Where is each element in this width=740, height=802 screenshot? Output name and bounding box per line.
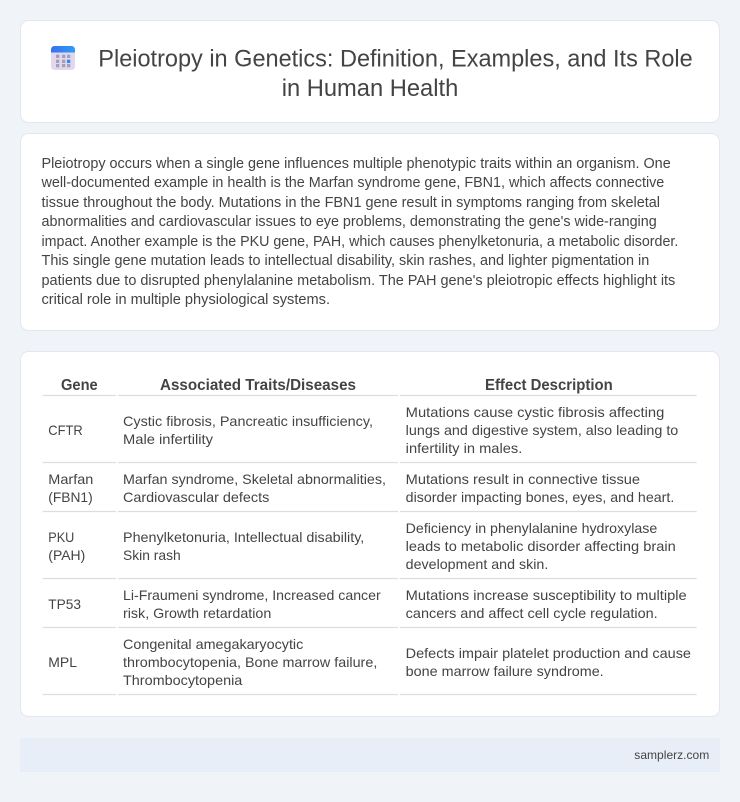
table row: MPL: MPL bbox=[48, 654, 77, 670]
table row: MPL: Defects impair platelet production and cause bbox=[406, 645, 691, 661]
title: in Human Health bbox=[282, 75, 458, 102]
table row: Marfan (FBN1): Marfan bbox=[48, 471, 93, 487]
table row: CFTR: lungs and digestive system, also leading to bbox=[406, 422, 679, 438]
panel: title header bbox=[20, 20, 720, 122]
table row: PKU (PAH): Phenylketonuria, Intellectual disability, bbox=[123, 529, 364, 545]
text block: pleiotropy description: Pleiotropy occurs when a single gene influences multiple phenotypic traits within an organism. One bbox=[42, 156, 671, 172]
icon: calendar grid bbox=[51, 46, 75, 70]
title: Pleiotropy in Genetics: Definition, Examples, and Its Role bbox=[98, 46, 693, 72]
table header: Gene bbox=[61, 377, 98, 394]
table row: PKU (PAH): Skin rash bbox=[123, 547, 181, 563]
text block: pleiotropy description: abnormalities and cardiovascular issues to eye problems, demonstrating the gene's wide-ranging bbox=[42, 214, 657, 230]
table row: TP53 bbox=[43, 587, 697, 628]
text block: pleiotropy description: critical role in multiple physiological systems. bbox=[42, 292, 330, 308]
table row: Marfan (FBN1): Cardiovascular defects bbox=[123, 489, 269, 505]
panel: gene table bbox=[20, 352, 720, 716]
table row: CFTR bbox=[43, 404, 697, 462]
table row: CFTR: infertility in males. bbox=[406, 440, 522, 456]
table row: Marfan (FBN1): (FBN1) bbox=[48, 489, 93, 505]
text block: pleiotropy description: well-documented example in health is the Marfan syndrome gene, FBN1, which affects connective bbox=[41, 175, 664, 191]
table row: CFTR: Male infertility bbox=[123, 431, 213, 447]
table row: MPL: bone marrow failure syndrome. bbox=[406, 663, 604, 679]
text block: pleiotropy description: patients due to disrupted phenylalanine metabolism. The PAH gene's pleiotropic effects highlight its bbox=[42, 273, 675, 289]
table header: Effect Description bbox=[485, 377, 613, 394]
footer: samplerz.com bbox=[634, 748, 709, 762]
text block: pleiotropy description: tissue throughout the body. Mutations in the FBN1 gene result in symptoms ranging from skeletal bbox=[42, 195, 660, 211]
table row: CFTR: Mutations cause cystic fibrosis affecting bbox=[406, 404, 664, 420]
text block: pleiotropy description: impact. Another example is the PKU gene, PAH, which causes phenylketonuria, a metabolic disorder. bbox=[42, 234, 678, 250]
table row: MPL: Congenital amegakaryocytic bbox=[123, 636, 303, 652]
table row: TP53: risk, Growth retardation bbox=[123, 605, 271, 621]
table row: TP53: TP53 bbox=[48, 596, 81, 612]
table row: TP53: cancers and affect cell cycle regulation. bbox=[406, 605, 658, 621]
text block: pleiotropy description bbox=[41, 156, 678, 308]
table row: TP53: Li-Fraumeni syndrome, Increased cancer bbox=[123, 587, 381, 603]
table row: CFTR: Cystic fibrosis, Pancreatic insufficiency, bbox=[123, 413, 373, 429]
table row: PKU (PAH): development and skin. bbox=[406, 556, 548, 572]
text block: pleiotropy description: This single gene mutation leads to intellectual disability, skin rashes, and lighter pigmentation in bbox=[42, 253, 649, 269]
table row: Marfan (FBN1): Marfan syndrome, Skeletal abnormalities, bbox=[123, 471, 386, 487]
table header bbox=[43, 377, 697, 396]
table row: MPL bbox=[43, 636, 697, 694]
table header: Associated Traits/Diseases bbox=[160, 377, 356, 394]
title bbox=[98, 46, 693, 102]
table row: Marfan (FBN1): Mutations result in connective tissue bbox=[406, 471, 640, 487]
table row: PKU (PAH): (PAH) bbox=[48, 547, 85, 563]
table row: PKU (PAH): Deficiency in phenylalanine hydroxylase bbox=[406, 520, 658, 536]
table row: Marfan (FBN1) bbox=[43, 471, 697, 512]
footer bbox=[20, 738, 720, 772]
table row: PKU (PAH): leads to metabolic disorder affecting brain bbox=[406, 538, 676, 554]
table row: PKU (PAH): PKU bbox=[48, 529, 74, 545]
table row: CFTR: CFTR bbox=[48, 422, 83, 438]
table row: MPL: Thrombocytopenia bbox=[123, 672, 243, 688]
table row: Marfan (FBN1): disorder impacting bones, eyes, and heart. bbox=[406, 489, 674, 505]
table row: PKU (PAH) bbox=[43, 520, 697, 578]
table row: MPL: thrombocytopenia, Bone marrow failure, bbox=[123, 654, 377, 670]
table row: TP53: Mutations increase susceptibility to multiple bbox=[406, 587, 687, 603]
panel: introduction paragraph bbox=[20, 134, 720, 330]
